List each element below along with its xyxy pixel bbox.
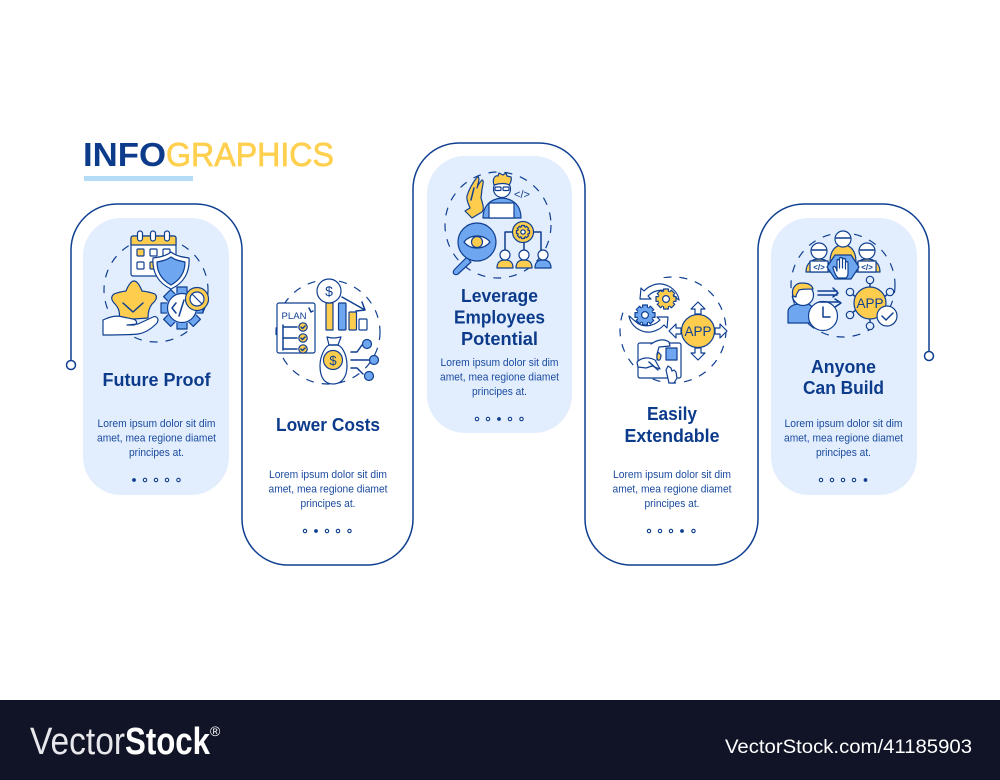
footer id: VectorStock.com/41185903 [725, 736, 972, 758]
body text [268, 469, 388, 510]
body text: amet, mea regione diamet [268, 484, 388, 496]
heading: Can Build [803, 378, 884, 398]
body text: principes at. [129, 447, 184, 459]
heading [803, 357, 884, 398]
pagination dots [819, 478, 867, 482]
connector outline [71, 143, 929, 565]
body text: Lorem ipsum dolor sit dim [784, 418, 903, 430]
icon: leverage employees potential: </> [514, 189, 530, 201]
footer logo: ® [210, 723, 221, 739]
body text: Lorem ipsum dolor sit dim [440, 357, 559, 369]
heading: Lower Costs [276, 415, 380, 435]
icon: future proof [100, 231, 208, 342]
icon: leverage employees potential [445, 172, 551, 278]
icon: lower costs: $ [329, 353, 337, 368]
heading: Extendable [624, 426, 720, 446]
icon: anyone can build: </> [813, 263, 825, 272]
icon: anyone can build: APP [856, 296, 884, 311]
heading: Easily [647, 404, 697, 424]
icon: lower costs: $ [325, 283, 333, 299]
body text [612, 469, 732, 510]
title [83, 137, 334, 174]
body text: principes at. [816, 447, 871, 459]
pagination dots [132, 478, 180, 482]
panel: leverage employees potential [427, 156, 572, 433]
connector start node [66, 360, 76, 370]
connector end node [924, 352, 934, 360]
body text [97, 418, 216, 459]
body text [440, 357, 559, 398]
body text [784, 418, 903, 459]
body text: amet, mea regione diamet [97, 432, 216, 444]
heading: Potential [461, 329, 538, 349]
pagination dots [647, 529, 695, 533]
heading: Leverage [461, 286, 538, 306]
icon: easily extendable [620, 277, 727, 383]
footer bar [0, 700, 1000, 780]
title underline [84, 176, 193, 181]
body text: amet, mea regione diamet [440, 372, 559, 384]
panel: anyone can build [771, 218, 917, 495]
title: INFO [83, 137, 166, 174]
icon: easily extendable: APP [684, 324, 712, 339]
body text: amet, mea regione diamet [612, 484, 732, 496]
icon: lower costs: PLAN [282, 311, 307, 322]
icon: lower costs [276, 279, 380, 384]
heading: Future Proof [102, 370, 211, 390]
icon: anyone can build [788, 231, 897, 337]
title: GRAPHICS [166, 137, 334, 174]
heading: Anyone [811, 357, 876, 377]
icon: anyone can build: </> [861, 263, 873, 272]
body text: principes at. [472, 386, 527, 398]
heading [454, 286, 545, 349]
pagination dots [303, 529, 351, 533]
heading [624, 404, 720, 446]
panel: lower costs [268, 279, 388, 533]
body text: principes at. [644, 498, 700, 510]
pagination dots [475, 417, 523, 421]
body text: Lorem ipsum dolor sit dim [269, 469, 387, 481]
panel: easily extendable [612, 277, 732, 533]
body text: principes at. [300, 498, 356, 510]
panel: future proof [83, 218, 229, 495]
body text: Lorem ipsum dolor sit dim [98, 418, 216, 430]
body text: amet, mea regione diamet [784, 432, 903, 444]
heading: Employees [454, 308, 545, 328]
footer logo: VectorStock [30, 721, 228, 763]
body text: Lorem ipsum dolor sit dim [613, 469, 731, 481]
